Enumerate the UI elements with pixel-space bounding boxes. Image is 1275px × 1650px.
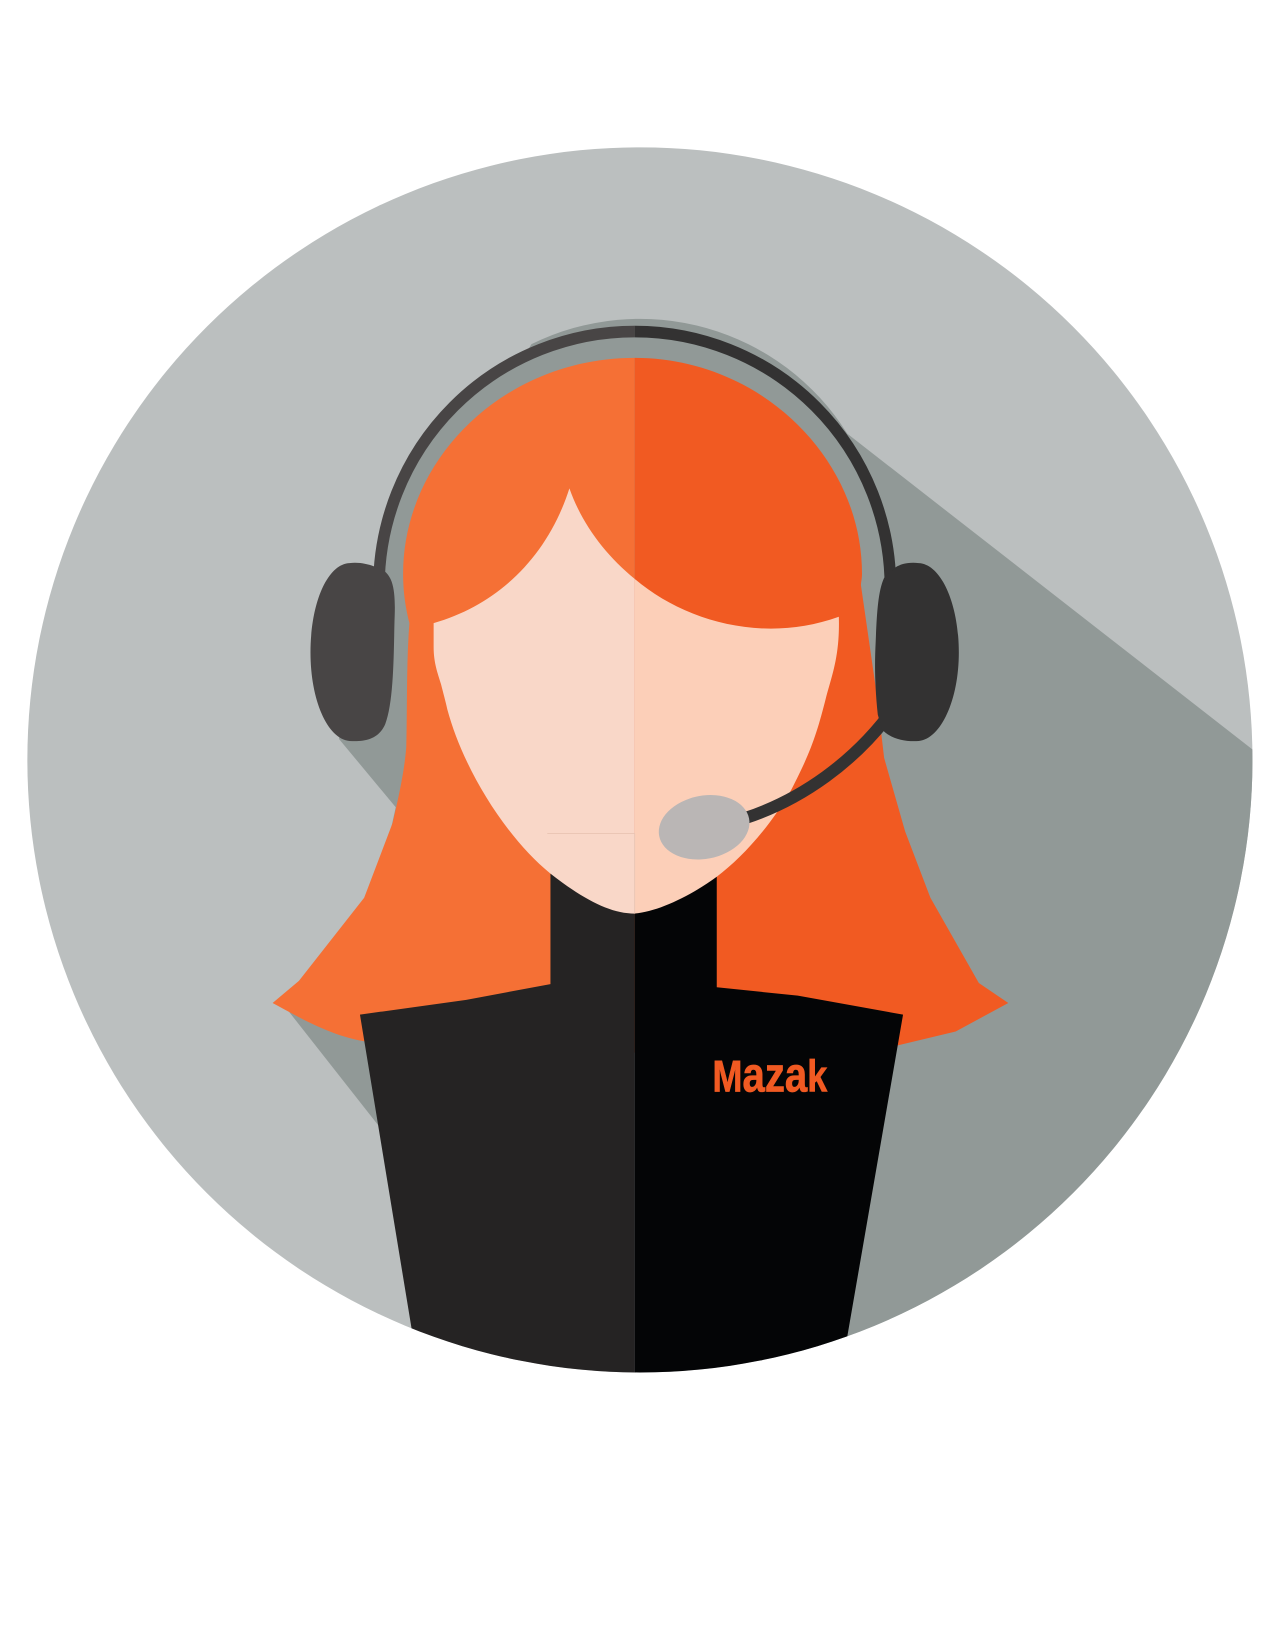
right ear cup	[875, 563, 959, 741]
headset	[310, 332, 959, 867]
long cast shadow	[286, 319, 1258, 1389]
hair: right side	[635, 358, 1008, 1052]
microphone	[653, 788, 755, 867]
left ear cup	[310, 563, 395, 741]
infographic: support agent avatar	[27, 147, 1252, 1372]
headband	[379, 332, 635, 587]
background circle	[27, 147, 1252, 1372]
chin crease line	[547, 834, 635, 914]
Mazak logo: Mazak	[713, 1047, 828, 1102]
hair: left side	[273, 358, 635, 1052]
face: right half	[635, 579, 839, 914]
microphone boom	[746, 707, 895, 818]
shirt: left half	[360, 868, 635, 1389]
shirt: right half	[635, 868, 903, 1389]
headband interior shadow	[379, 332, 890, 843]
face: left half	[434, 488, 635, 914]
